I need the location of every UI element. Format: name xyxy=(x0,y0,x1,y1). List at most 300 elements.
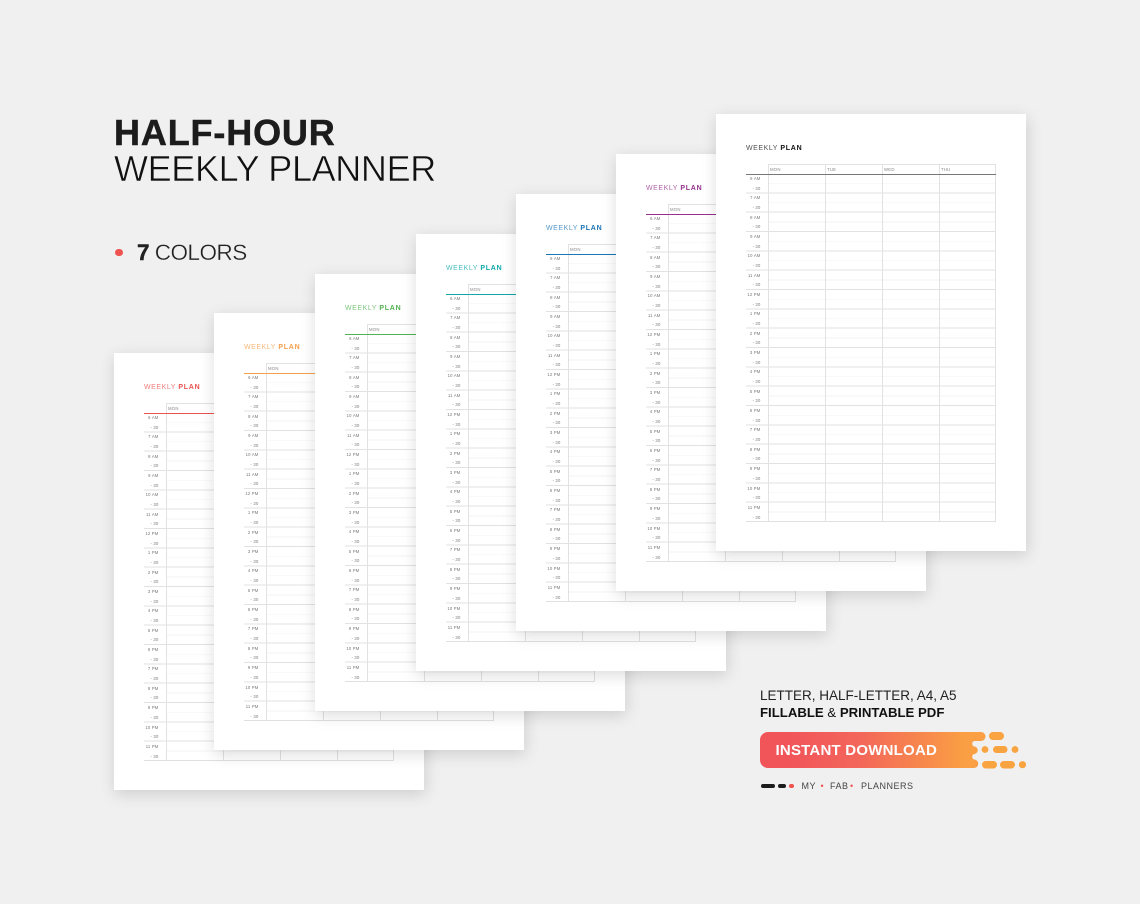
schedule table: - 30 xyxy=(452,615,460,620)
schedule table: - 30 xyxy=(752,398,760,403)
schedule table: - 30 xyxy=(552,575,560,580)
schedule table: 2 PM xyxy=(148,570,158,575)
schedule table: THU xyxy=(641,287,650,292)
schedule table: 6 AM xyxy=(550,256,560,261)
schedule table: 10 AM xyxy=(146,492,158,497)
schedule table: 8 PM xyxy=(750,447,760,452)
schedule table: - 30 xyxy=(150,734,158,739)
schedule table: - 30 xyxy=(652,400,660,405)
schedule table: 1 PM xyxy=(750,311,760,316)
schedule table: 9 PM xyxy=(248,665,258,670)
page title: WEEKLY PLAN xyxy=(244,344,300,350)
schedule table: - 30 xyxy=(150,579,158,584)
schedule table: - 30 xyxy=(452,576,460,581)
schedule table xyxy=(546,244,796,602)
schedule table: - 30 xyxy=(150,695,158,700)
schedule table: 9 AM xyxy=(450,354,460,359)
schedule table: 11 PM xyxy=(448,625,460,630)
schedule table: 4 PM xyxy=(248,568,258,573)
schedule table: 2 PM xyxy=(248,530,258,535)
schedule table: 10 AM xyxy=(648,293,660,298)
schedule table: THU xyxy=(941,167,950,172)
schedule table: - 30 xyxy=(250,636,258,641)
planner page: blue xyxy=(516,194,826,631)
schedule table: - 30 xyxy=(452,402,460,407)
schedule table: 12 PM xyxy=(447,412,460,417)
schedule table: 9 AM xyxy=(248,433,258,438)
logo text: PLANNERS xyxy=(861,781,914,791)
schedule table: - 30 xyxy=(351,558,360,563)
schedule table: - 30 xyxy=(552,536,560,541)
schedule table: - 30 xyxy=(752,321,760,326)
schedule table: 12 PM xyxy=(547,372,560,377)
schedule table: 11 AM xyxy=(246,472,258,477)
schedule table: - 30 xyxy=(351,423,360,428)
schedule table: MON xyxy=(268,366,279,371)
schedule table: TUE xyxy=(727,207,736,212)
schedule table: MON xyxy=(570,247,581,252)
schedule table: 10 AM xyxy=(548,333,560,338)
schedule table: 1 PM xyxy=(450,431,460,436)
schedule table: - 30 xyxy=(150,502,158,507)
schedule table: 7 PM xyxy=(650,467,660,472)
schedule table: 11 AM xyxy=(748,273,760,278)
schedule table: 1 PM xyxy=(349,471,360,476)
schedule table: - 30 xyxy=(250,539,258,544)
schedule table: 6 PM xyxy=(650,448,660,453)
red bullet dot xyxy=(115,248,122,256)
page title: WEEKLY PLAN xyxy=(446,264,502,272)
schedule table: - 30 xyxy=(652,342,660,347)
schedule table: 6 PM xyxy=(750,408,760,413)
schedule table: 1 PM xyxy=(148,550,158,555)
schedule table: 5 PM xyxy=(450,509,460,514)
schedule table: WED xyxy=(884,167,895,172)
schedule table: 11 AM xyxy=(146,512,158,517)
schedule table: 6 AM xyxy=(349,336,360,341)
schedule table: MON xyxy=(369,327,380,332)
schedule table: 6 AM xyxy=(650,216,660,221)
schedule table: 7 PM xyxy=(750,427,760,432)
schedule table: - 30 xyxy=(552,285,560,290)
brand logo: my fab planners xyxy=(761,781,914,791)
schedule table: - 30 xyxy=(351,520,360,525)
schedule table: WED xyxy=(584,287,595,292)
bullet: 7 colors xyxy=(115,240,247,264)
schedule table: 4 PM xyxy=(450,489,460,494)
schedule table: 2 PM xyxy=(349,491,360,496)
logo text: • xyxy=(850,781,854,791)
schedule table: - 30 xyxy=(150,715,158,720)
schedule table: - 30 xyxy=(351,442,360,447)
schedule table: - 30 xyxy=(652,284,660,289)
schedule table: - 30 xyxy=(250,617,258,622)
schedule table: 10 PM xyxy=(747,486,760,490)
schedule table: - 30 xyxy=(652,264,660,269)
schedule table: - 30 xyxy=(452,557,460,562)
schedule table xyxy=(646,204,896,562)
schedule table: - 30 xyxy=(452,460,460,465)
schedule table: 12 PM xyxy=(647,332,660,337)
page title: WEEKLY PLAN xyxy=(746,144,802,152)
schedule table: TUE xyxy=(527,287,536,292)
schedule table: 8 PM xyxy=(450,567,460,572)
title: half-hour weekly planner xyxy=(114,112,436,189)
schedule table: - 30 xyxy=(150,637,158,642)
schedule table: TUE xyxy=(225,406,234,411)
schedule table: - 30 xyxy=(250,423,258,428)
schedule table: THU xyxy=(741,247,750,252)
schedule table: - 30 xyxy=(452,364,460,369)
schedule table: - 30 xyxy=(351,616,360,621)
schedule table: 6 AM xyxy=(148,415,158,420)
schedule table: - 30 xyxy=(452,538,460,543)
schedule table: - 30 xyxy=(250,385,258,390)
schedule table: - 30 xyxy=(452,325,460,330)
schedule table: - 30 xyxy=(150,676,158,681)
schedule table: 12 PM xyxy=(145,531,158,536)
schedule table: - 30 xyxy=(250,443,258,448)
schedule table xyxy=(144,403,394,761)
schedule table: - 30 xyxy=(150,521,158,526)
schedule table: - 30 xyxy=(250,520,258,525)
schedule table: - 30 xyxy=(652,322,660,327)
schedule table: - 30 xyxy=(250,404,258,409)
schedule table: 6 AM xyxy=(248,375,258,380)
schedule table: - 30 xyxy=(552,266,560,271)
schedule table: - 30 xyxy=(552,382,560,387)
schedule table: 4 PM xyxy=(550,449,560,454)
schedule table: 3 PM xyxy=(550,430,560,435)
schedule table: 10 PM xyxy=(346,646,360,650)
schedule table: - 30 xyxy=(250,462,258,467)
schedule table: THU xyxy=(841,207,850,212)
schedule table: - 30 xyxy=(752,476,760,481)
schedule table: - 30 xyxy=(351,384,360,389)
schedule table: - 30 xyxy=(250,655,258,660)
schedule table: - 30 xyxy=(552,343,560,348)
schedule table: 8 PM xyxy=(650,487,660,492)
logo text: • xyxy=(820,781,824,791)
schedule table: 10 AM xyxy=(748,253,760,258)
title line light: WEEKLY PLANNER xyxy=(114,148,436,189)
schedule table: WED xyxy=(382,366,393,371)
schedule table: 6 PM xyxy=(349,568,360,573)
schedule table: MON xyxy=(670,207,681,212)
schedule table: - 30 xyxy=(552,498,560,503)
schedule table: 10 AM xyxy=(448,373,460,378)
schedule table: 5 PM xyxy=(750,389,760,394)
schedule table: - 30 xyxy=(752,244,760,249)
schedule table: 8 AM xyxy=(349,375,360,380)
schedule table: - 30 xyxy=(752,282,760,287)
schedule table: - 30 xyxy=(150,483,158,488)
schedule table: 8 AM xyxy=(750,215,760,220)
schedule table: - 30 xyxy=(752,360,760,365)
schedule table: 3 PM xyxy=(349,510,360,515)
schedule table: - 30 xyxy=(552,478,560,483)
schedule table: 7 AM xyxy=(650,235,660,240)
schedule table: - 30 xyxy=(150,444,158,449)
schedule table: 10 PM xyxy=(447,606,460,610)
schedule table: - 30 xyxy=(452,499,460,504)
schedule table xyxy=(746,164,996,522)
schedule table: - 30 xyxy=(351,655,360,660)
schedule table: 3 PM xyxy=(650,390,660,395)
schedule table: - 30 xyxy=(351,675,360,680)
schedule table: MON xyxy=(770,167,781,172)
schedule table: 7 PM xyxy=(148,666,158,671)
schedule table: - 30 xyxy=(552,440,560,445)
schedule table: - 30 xyxy=(552,324,560,329)
schedule table: - 30 xyxy=(652,555,660,560)
schedule table: 9 PM xyxy=(349,626,360,631)
schedule table xyxy=(446,284,696,642)
schedule table: 8 PM xyxy=(148,686,158,691)
schedule table: 9 PM xyxy=(550,546,560,551)
schedule table: - 30 xyxy=(552,556,560,561)
7 colors text: 7 COLORS xyxy=(137,240,247,264)
schedule table: 11 PM xyxy=(246,704,258,709)
schedule table: - 30 xyxy=(150,754,158,759)
schedule table: 7 PM xyxy=(450,547,460,552)
schedule table: 2 PM xyxy=(750,331,760,336)
schedule table: - 30 xyxy=(652,226,660,231)
schedule table: - 30 xyxy=(452,344,460,349)
schedule table: WED xyxy=(483,327,494,332)
schedule table: - 30 xyxy=(250,578,258,583)
schedule table: 2 PM xyxy=(650,371,660,376)
schedule table: 8 AM xyxy=(650,255,660,260)
schedule table: 7 PM xyxy=(248,626,258,631)
schedule table: - 30 xyxy=(652,380,660,385)
schedule table: - 30 xyxy=(652,496,660,501)
schedule table: 3 PM xyxy=(450,470,460,475)
schedule table: - 30 xyxy=(552,304,560,309)
schedule table: 10 PM xyxy=(647,526,660,530)
schedule table: 9 AM xyxy=(349,394,360,399)
schedule table: 9 PM xyxy=(650,506,660,511)
schedule table: 5 PM xyxy=(650,429,660,434)
schedule table: - 30 xyxy=(150,463,158,468)
page title: WEEKLY PLAN xyxy=(646,184,702,192)
schedule table: - 30 xyxy=(752,515,760,520)
planner page: purple xyxy=(616,154,926,591)
schedule table: 11 AM xyxy=(448,393,460,398)
schedule table: 8 AM xyxy=(550,295,560,300)
button body with lobes xyxy=(760,732,986,768)
schedule table: 6 AM xyxy=(750,176,760,181)
schedule table: 7 AM xyxy=(349,355,360,360)
schedule table: - 30 xyxy=(652,516,660,521)
schedule table: 3 PM xyxy=(248,549,258,554)
schedule table: - 30 xyxy=(351,500,360,505)
schedule table: 5 PM xyxy=(349,549,360,554)
logo dashes xyxy=(761,784,774,788)
button label: INSTANT DOWNLOAD xyxy=(776,742,937,759)
schedule table: - 30 xyxy=(752,495,760,500)
schedule table: 1 PM xyxy=(550,391,560,396)
schedule table: 10 PM xyxy=(547,566,560,570)
schedule table: 7 AM xyxy=(248,394,258,399)
schedule table: 7 PM xyxy=(349,587,360,592)
schedule table: - 30 xyxy=(250,694,258,699)
schedule table: - 30 xyxy=(652,458,660,463)
schedule table: - 30 xyxy=(652,438,660,443)
schedule table: 2 PM xyxy=(450,451,460,456)
schedule table xyxy=(345,324,595,682)
schedule table: 6 AM xyxy=(450,296,460,301)
schedule table: 7 AM xyxy=(148,434,158,439)
logo text: FAB xyxy=(830,781,849,791)
schedule table: 4 PM xyxy=(349,529,360,534)
schedule table: MON xyxy=(168,406,179,411)
schedule table: - 30 xyxy=(452,518,460,523)
schedule table: 11 PM xyxy=(347,665,360,670)
schedule table: - 30 xyxy=(652,245,660,250)
schedule table: WED xyxy=(684,247,695,252)
schedule table: 1 PM xyxy=(248,510,258,515)
schedule table: 6 PM xyxy=(248,607,258,612)
schedule table: 11 AM xyxy=(347,433,360,438)
schedule table: - 30 xyxy=(250,714,258,719)
schedule table: - 30 xyxy=(452,635,460,640)
schedule table: - 30 xyxy=(250,481,258,486)
schedule table: WED xyxy=(282,406,293,411)
schedule table: THU xyxy=(540,327,549,332)
planner page: orange xyxy=(214,313,524,750)
schedule table: TUE xyxy=(325,366,334,371)
schedule table: 8 PM xyxy=(349,607,360,612)
schedule table: - 30 xyxy=(652,361,660,366)
schedule table: - 30 xyxy=(752,186,760,191)
schedule table: 3 PM xyxy=(148,589,158,594)
dashes trailing the button xyxy=(982,732,1026,768)
page title: WEEKLY PLAN xyxy=(546,224,602,232)
schedule table: - 30 xyxy=(752,263,760,268)
logo text xyxy=(802,781,914,791)
schedule table: - 30 xyxy=(351,539,360,544)
schedule table: 11 PM xyxy=(146,744,158,749)
planner page: green xyxy=(315,274,624,711)
schedule table: - 30 xyxy=(351,597,360,602)
schedule table: TUE xyxy=(627,247,636,252)
planner page: teal xyxy=(416,234,726,671)
schedule table: 8 PM xyxy=(248,646,258,651)
schedule table: 7 AM xyxy=(750,195,760,200)
schedule table: 10 PM xyxy=(145,724,158,730)
schedule table: 4 PM xyxy=(750,369,760,374)
text: fillable and printable pdf: FILLABLE & PRINTABLE PDF xyxy=(760,704,944,720)
schedule table: - 30 xyxy=(351,578,360,583)
schedule table: - 30 xyxy=(150,560,158,565)
schedule table: MON xyxy=(470,287,481,292)
schedule table: 11 AM xyxy=(548,353,560,358)
schedule table: - 30 xyxy=(150,599,158,604)
schedule table: - 30 xyxy=(250,597,258,602)
schedule table: - 30 xyxy=(752,302,760,307)
schedule table: 11 PM xyxy=(648,545,660,550)
schedule table: - 30 xyxy=(652,535,660,540)
schedule table: 4 PM xyxy=(650,409,660,414)
schedule table: THU xyxy=(439,366,448,371)
schedule table: - 30 xyxy=(150,618,158,623)
schedule table: 9 PM xyxy=(148,705,158,710)
page title: WEEKLY PLAN xyxy=(345,304,401,312)
schedule table: - 30 xyxy=(752,224,760,229)
schedule table: 5 PM xyxy=(148,628,158,633)
schedule table: TUE xyxy=(827,167,836,172)
schedule table: - 30 xyxy=(552,420,560,425)
schedule table: - 30 xyxy=(452,306,460,311)
schedule table: 9 AM xyxy=(750,234,760,239)
schedule table: 6 PM xyxy=(148,647,158,652)
title line bold: HALF-HOUR xyxy=(114,112,336,152)
schedule table: 6 PM xyxy=(450,528,460,533)
schedule table: - 30 xyxy=(150,541,158,546)
schedule table: - 30 xyxy=(452,422,460,427)
schedule table: 5 PM xyxy=(550,469,560,474)
schedule table: 3 PM xyxy=(750,350,760,355)
planner page: black xyxy=(716,114,1026,551)
schedule table: 12 PM xyxy=(245,491,258,496)
schedule table: - 30 xyxy=(351,365,360,370)
page title: WEEKLY PLAN xyxy=(144,384,200,390)
schedule table: 12 PM xyxy=(747,292,760,297)
schedule table: 4 PM xyxy=(148,608,158,613)
schedule table: - 30 xyxy=(452,441,460,446)
schedule table: 2 PM xyxy=(550,411,560,416)
schedule table: - 30 xyxy=(752,205,760,210)
schedule table: 1 PM xyxy=(650,351,660,356)
schedule table: 9 PM xyxy=(750,466,760,471)
schedule table: 9 PM xyxy=(450,586,460,591)
schedule table: 10 AM xyxy=(347,413,360,418)
schedule table: 7 AM xyxy=(450,315,460,320)
schedule table: 9 AM xyxy=(650,274,660,279)
schedule table: - 30 xyxy=(552,401,560,406)
schedule table: 8 AM xyxy=(248,414,258,419)
schedule table: - 30 xyxy=(752,340,760,345)
text: paper sizes: LETTER, HALF-LETTER, A4, A5 xyxy=(760,688,957,702)
schedule table: - 30 xyxy=(250,501,258,506)
schedule table: 8 AM xyxy=(148,454,158,459)
schedule table: - 30 xyxy=(452,596,460,601)
schedule table: 10 PM xyxy=(245,684,258,690)
schedule table: 12 PM xyxy=(346,452,360,457)
schedule table: - 30 xyxy=(351,404,360,409)
schedule table: 10 AM xyxy=(246,452,258,457)
schedule table: - 30 xyxy=(150,425,158,430)
schedule table: - 30 xyxy=(652,303,660,308)
schedule table: - 30 xyxy=(552,595,560,600)
schedule table: - 30 xyxy=(752,379,760,384)
schedule table: 11 AM xyxy=(648,313,660,318)
schedule table: - 30 xyxy=(752,456,760,461)
schedule table: - 30 xyxy=(552,362,560,367)
schedule table: - 30 xyxy=(351,481,360,486)
schedule table: - 30 xyxy=(752,437,760,442)
planner page: red xyxy=(114,353,424,790)
schedule table: 9 AM xyxy=(148,473,158,478)
schedule table: - 30 xyxy=(452,480,460,485)
schedule table: WED xyxy=(784,207,795,212)
schedule table: - 30 xyxy=(552,517,560,522)
schedule table: - 30 xyxy=(752,418,760,423)
schedule table: - 30 xyxy=(351,346,360,351)
schedule table xyxy=(244,363,494,721)
schedule table: 11 PM xyxy=(748,505,760,510)
